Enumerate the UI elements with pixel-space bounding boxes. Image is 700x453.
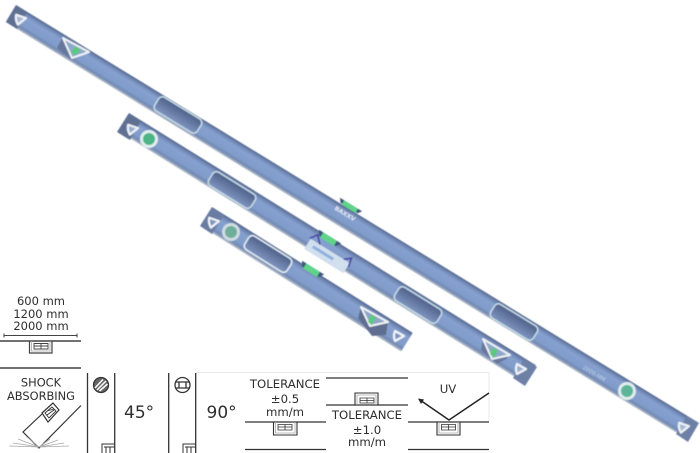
shock absorbing label <box>7 376 75 403</box>
side profile lines <box>169 373 196 453</box>
long level end cap left <box>6 5 27 29</box>
lengths text: 1200 mm <box>13 307 69 321</box>
hatched vial icon <box>94 378 108 392</box>
tolerance 1.0 text: mm/m <box>348 435 386 449</box>
icon panel: UV <box>408 382 489 450</box>
dimension line <box>4 334 77 338</box>
long level centre vial <box>332 198 362 224</box>
90 degree label: 90° <box>206 403 237 423</box>
level: 1200 mm medium <box>117 113 537 386</box>
side profile lines <box>88 373 115 453</box>
impact lines <box>9 437 69 447</box>
shock absorbing label: ABSORBING <box>7 389 75 403</box>
level: 600 mm short <box>200 207 413 352</box>
tolerance 1.0 text: TOLERANCE <box>331 408 402 422</box>
icon panel: lengths <box>0 294 81 368</box>
lengths text: 600 mm <box>17 294 65 308</box>
UV label: UV <box>440 382 456 396</box>
icon panel: tolerance 0.5 <box>245 377 326 450</box>
long level printed text: 2000-MM <box>581 365 606 383</box>
frame line <box>196 372 489 422</box>
bracket <box>102 444 115 453</box>
medium level grip 2 <box>393 285 443 325</box>
level cross-section <box>0 341 81 353</box>
tolerance 0.5 text <box>249 377 320 419</box>
tolerance 0.5 text: TOLERANCE <box>249 377 320 391</box>
icon panel: 90 degree vial <box>169 373 237 453</box>
tolerance 1.0 text: ±1.0 <box>353 423 381 437</box>
lengths text: 2000 mm <box>13 319 69 333</box>
tolerance 1.0 text <box>331 408 402 449</box>
medium level body <box>118 113 536 383</box>
long level grip 1 <box>153 95 203 135</box>
lengths text <box>13 294 69 333</box>
short level end hole right <box>394 331 404 341</box>
short level centre vial <box>299 261 324 280</box>
bracket <box>183 444 196 453</box>
long level triangular vial <box>57 38 89 60</box>
medium level round vial <box>140 130 158 148</box>
medium level grip 1 <box>207 170 257 210</box>
medium level end hole right <box>516 364 526 374</box>
long level round vial <box>618 382 636 400</box>
horizontal vial icon <box>175 378 190 392</box>
short level end cap left <box>200 207 224 234</box>
short level grip <box>243 234 293 274</box>
shock absorbing label: SHOCK <box>21 376 62 390</box>
long level grip 2 <box>489 302 539 342</box>
icon panel: tolerance 1.0 <box>326 378 408 449</box>
medium level end hole left <box>127 123 139 135</box>
UV rays <box>418 393 489 420</box>
icon panel: shock absorbing <box>7 376 81 448</box>
long level brand mark: BAXXV <box>333 205 357 223</box>
medium level centre vial <box>316 230 341 249</box>
tolerance 1.0 cross-section <box>326 378 408 405</box>
icon panel: 45 degree vial <box>88 373 154 453</box>
long level end hole left <box>15 13 27 25</box>
short level round vial <box>222 223 240 241</box>
divider line <box>0 367 81 369</box>
long level end hole right <box>678 421 690 433</box>
short level triangular vial <box>358 307 388 336</box>
tolerance 0.5 cross-section <box>245 422 326 450</box>
medium level end cap left <box>117 113 141 140</box>
UV cross-section <box>408 422 489 450</box>
medium level sticker <box>303 232 354 274</box>
long level end cap right <box>676 416 699 442</box>
45 degree label: 45° <box>124 403 154 423</box>
tilted level drawing <box>23 403 81 448</box>
medium level end cap right <box>513 359 537 386</box>
tolerance 0.5 text: ±0.5 <box>271 392 299 406</box>
medium level triangular vial <box>481 339 510 364</box>
short level end hole left <box>208 216 220 228</box>
tolerance 0.5 text: mm/m <box>266 405 304 419</box>
short level body <box>200 207 413 352</box>
